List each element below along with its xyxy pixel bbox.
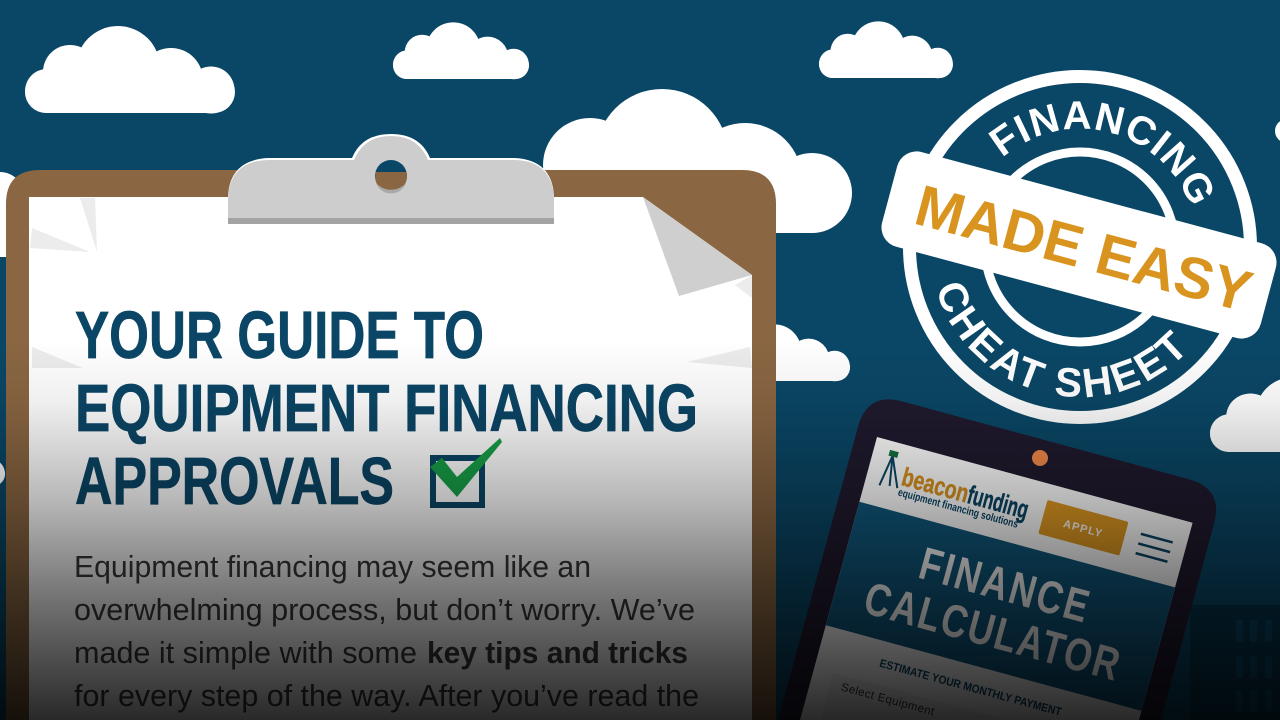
tablet — [778, 399, 1216, 720]
calculator form: Select Equipment — [840, 682, 936, 719]
tablet body — [778, 399, 1216, 720]
logo: equipment financing solutions — [897, 487, 1019, 531]
camera dot — [1032, 450, 1048, 466]
icon: checked box — [430, 438, 502, 505]
logo: beacon — [899, 462, 972, 508]
stamp curved text: financing: FINANCING — [988, 101, 1212, 204]
stamp badge — [882, 70, 1276, 424]
logo tripod icon — [879, 450, 906, 490]
intro paragraph: overwhelming process, but don’t worry. We’ve — [74, 592, 695, 627]
title: EQUIPMENT FINANCING — [75, 371, 698, 446]
building silhouette — [1190, 605, 1280, 720]
calculator form — [820, 658, 1063, 720]
logo: funding — [964, 479, 1032, 525]
tablet screen — [800, 437, 1193, 720]
clipboard board — [6, 170, 776, 720]
intro paragraph: made it simple with some — [74, 635, 417, 670]
title: YOUR GUIDE TO — [75, 298, 484, 373]
intro paragraph: key tips and tricks — [427, 635, 688, 670]
stamp curved text: cheat sheet: CHEAT SHEET — [939, 283, 1183, 398]
intro paragraph: Equipment financing may seem like an — [74, 549, 591, 584]
dark gradient overlay — [0, 340, 1280, 720]
metal clip — [228, 134, 554, 224]
paper wrinkles — [30, 198, 752, 368]
finance calculator heading: FINANCE — [914, 537, 1095, 632]
paper sheet — [29, 197, 752, 720]
title: APPROVALS — [75, 444, 394, 519]
logo — [877, 450, 1034, 532]
clouds — [0, 21, 1280, 487]
clipboard — [6, 134, 776, 720]
stamp banner — [877, 147, 1280, 343]
intro paragraph: for every step of the way. After you’ve read the — [74, 678, 699, 713]
folded paper corner — [643, 197, 752, 296]
apply button: APPLY — [1062, 518, 1104, 540]
stamp banner: MADE EASY — [909, 173, 1259, 325]
intro paragraph — [74, 549, 699, 713]
blue header band — [826, 502, 1175, 711]
title — [75, 298, 698, 519]
stamp rings — [910, 76, 1250, 418]
apply button — [1038, 500, 1129, 556]
finance calculator heading: CALCULATOR — [859, 572, 1125, 690]
hamburger menu — [1135, 533, 1173, 563]
